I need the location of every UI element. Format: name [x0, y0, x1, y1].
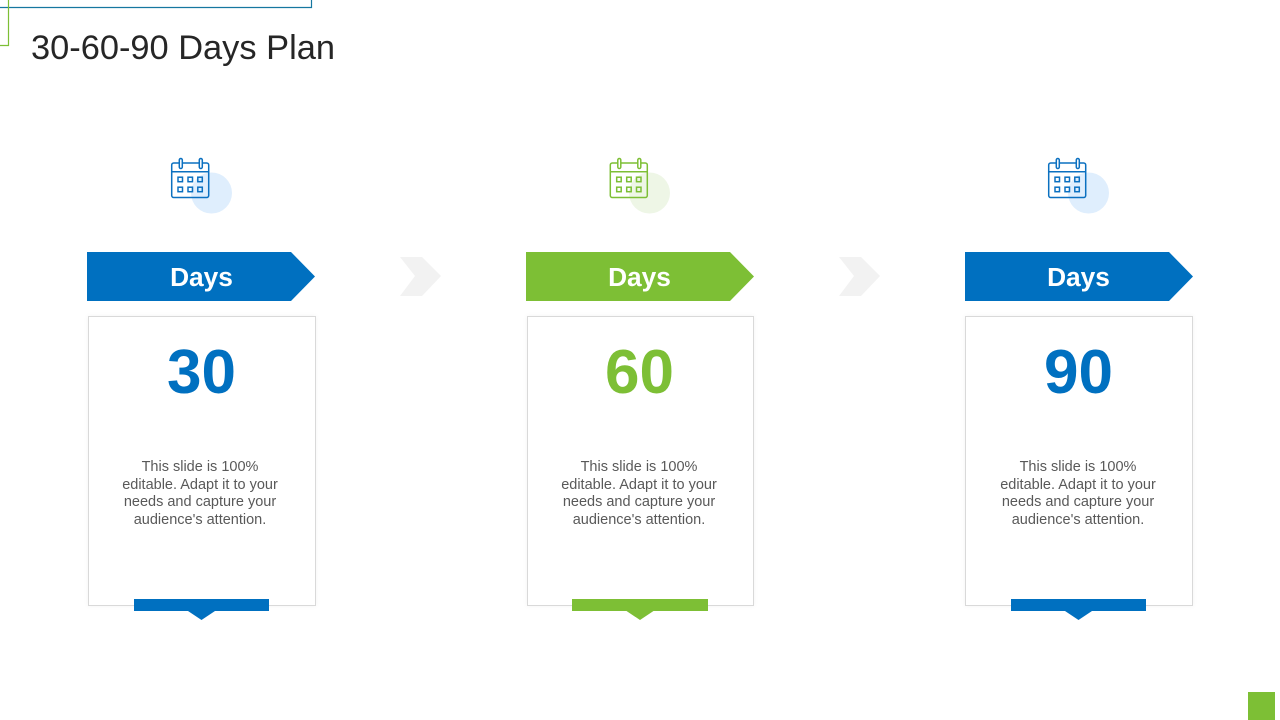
number: 30 [167, 338, 236, 407]
description: needs and capture your [124, 494, 276, 510]
description [561, 459, 717, 528]
arrow: chevron between 60 and 90 [840, 257, 880, 296]
corner accent: bottom-right green square [1248, 692, 1275, 720]
banner arrow [526, 252, 754, 301]
card [965, 316, 1193, 606]
banner arrow [87, 252, 315, 301]
number: 60 [605, 338, 674, 407]
card footer tab [1011, 599, 1146, 620]
card footer tab [134, 599, 269, 620]
description: editable. Adapt it to your [1000, 477, 1156, 493]
description: editable. Adapt it to your [561, 477, 717, 493]
number: 90 [1044, 338, 1113, 407]
panel: 60 days [526, 158, 754, 620]
description: This slide is 100% [581, 459, 697, 475]
description: This slide is 100% [142, 459, 258, 475]
description: This slide is 100% [1020, 459, 1136, 475]
description: audience's attention. [134, 512, 266, 528]
card [88, 316, 316, 606]
banner label: Days [170, 262, 233, 292]
corner accent: top-left frame lines [0, 0, 312, 46]
panel: 90 days [965, 158, 1193, 620]
description: needs and capture your [1002, 494, 1154, 510]
banner label: Days [1047, 262, 1110, 292]
banner label: Days [608, 262, 671, 292]
description: editable. Adapt it to your [122, 477, 278, 493]
icon: green calendar [610, 158, 670, 214]
description: audience's attention. [1012, 512, 1144, 528]
banner arrow [965, 252, 1193, 301]
icon: blue calendar [170, 158, 232, 214]
icon: blue calendar [1048, 158, 1109, 214]
card footer tab [572, 599, 708, 620]
description [122, 459, 278, 528]
arrow: chevron between 30 and 60 [400, 257, 440, 296]
description: audience's attention. [573, 512, 705, 528]
title: 30-60-90 Days Plan [31, 29, 335, 67]
panel: 30 days [87, 158, 316, 620]
description [1000, 459, 1156, 528]
card [527, 316, 754, 606]
description: needs and capture your [563, 494, 715, 510]
